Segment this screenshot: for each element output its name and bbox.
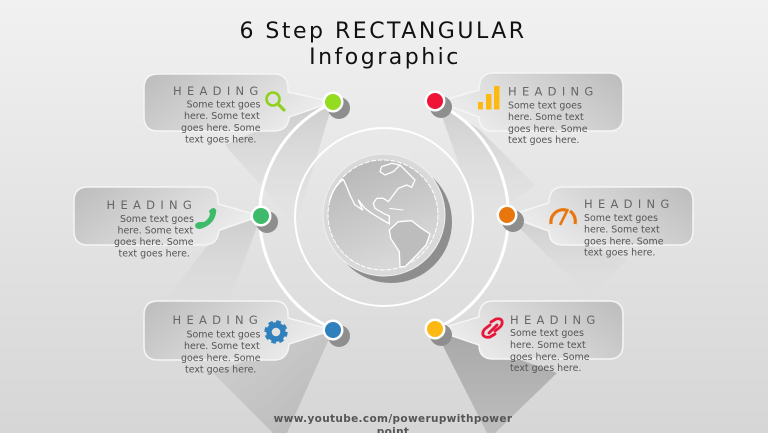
node: green lime (322, 92, 350, 119)
inner ring (295, 128, 473, 306)
panel: top left bubble (144, 74, 333, 146)
outer ring right arc (435, 106, 508, 329)
body text: here. Some text (184, 341, 260, 352)
north america coast (329, 163, 415, 224)
body text (510, 328, 590, 374)
body text: here. Some text (510, 340, 586, 351)
globe (323, 154, 452, 283)
body text: Some text goes (186, 100, 260, 110)
heading: HEADING (510, 313, 601, 327)
node: yellow (424, 318, 452, 346)
body text: Some text goes (508, 100, 582, 112)
heading: HEADING (173, 84, 264, 98)
title: 6 Step RECTANGULAR (239, 19, 527, 44)
long shadow: middle right (507, 216, 627, 297)
node: orange (496, 204, 524, 232)
body text: here. Some text (184, 111, 260, 122)
long shadow: bottom left (213, 330, 333, 433)
body text (584, 213, 664, 258)
body text: text goes here. (118, 248, 190, 260)
heading: HEADING (508, 84, 599, 98)
icon: bar chart (478, 86, 500, 110)
body text: text goes here. (584, 248, 655, 258)
body text (181, 100, 261, 146)
panel: middle left bubble (74, 187, 261, 260)
body text: goes here. Some (510, 352, 590, 363)
heading: HEADING (106, 198, 197, 212)
long shadow: top right (437, 102, 535, 225)
body text: text goes here. (508, 135, 579, 146)
body text: goes here. Some (508, 124, 588, 135)
long shadow: top left (225, 102, 333, 225)
body text: text goes here. (510, 363, 581, 374)
body text: Some text goes (120, 214, 194, 225)
long shadow: middle left (165, 216, 261, 320)
body text: here. Some text (118, 226, 193, 236)
node: green (250, 206, 278, 233)
panel: bottom right bubble (435, 301, 623, 374)
south america (389, 221, 430, 267)
panel: top right bubble (437, 73, 623, 146)
footer url: www.youtube.com/powerupwithpower (274, 413, 513, 425)
body text: goes here. Some (181, 123, 261, 134)
title (239, 19, 527, 70)
body text: Some text goes (186, 330, 260, 340)
node: red (424, 90, 452, 118)
footer url (274, 413, 513, 433)
node: blue (322, 320, 350, 347)
body text (114, 214, 194, 260)
long shadow: bottom right (435, 330, 557, 433)
icon: chain link (483, 319, 502, 337)
body text: goes here. Some (181, 353, 261, 364)
body text: goes here. Some (114, 237, 194, 248)
heading: HEADING (172, 313, 263, 327)
panel: middle right bubble (507, 187, 693, 258)
panel: bottom left bubble (144, 301, 333, 376)
icon: gauge (551, 209, 575, 225)
outer ring left arc (260, 106, 333, 329)
body text (181, 330, 261, 376)
cuba (389, 208, 403, 210)
body text (508, 100, 588, 146)
body text: here. Some text (584, 224, 660, 236)
icon: magnifier (266, 92, 284, 110)
body text: Some text goes (510, 328, 584, 339)
icon: phone (195, 208, 216, 229)
heading: HEADING (584, 197, 675, 211)
body text: Some text goes (584, 213, 658, 224)
title: Infographic (309, 45, 461, 70)
icon: gear (266, 322, 286, 342)
body text: text goes here. (185, 364, 256, 376)
body text: goes here. Some (584, 236, 664, 248)
body text: here. Some text (508, 112, 584, 123)
body text: text goes here. (185, 134, 256, 146)
